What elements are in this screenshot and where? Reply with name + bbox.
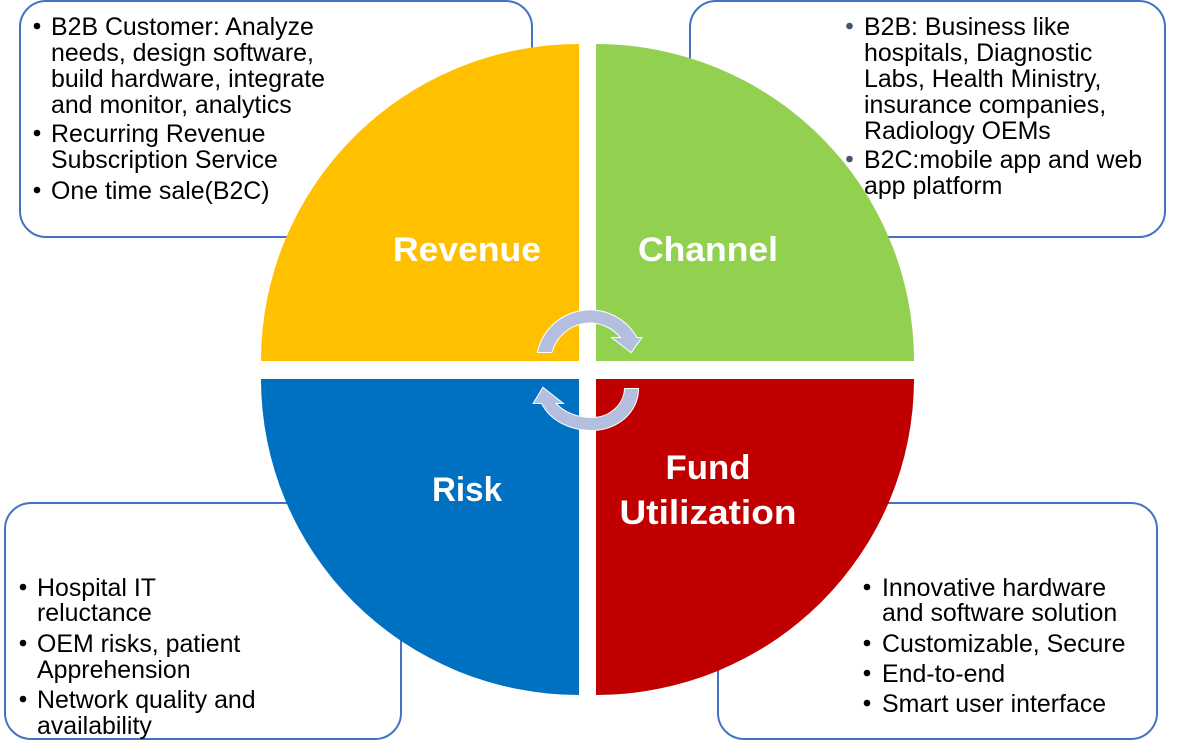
quadrant: channel (596, 44, 914, 361)
text block: fund utilization: Smart user interface (882, 690, 1106, 718)
heading: Fund Utilization: Fund (666, 449, 750, 487)
text block: revenue: Subscription Service (51, 146, 278, 174)
quadrant: risk (261, 379, 579, 695)
text block: channel: hospitals, Diagnostic (864, 39, 1092, 67)
heading: Risk: Risk (432, 471, 502, 509)
heading: Fund Utilization: Utilization (620, 494, 796, 532)
text block: channel: insurance companies, (864, 91, 1106, 119)
text block: fund utilization: and software solution (882, 599, 1117, 627)
text block: channel (846, 13, 1142, 200)
text block: risk: availability (37, 712, 152, 740)
arrow: clockwise top (538, 310, 641, 352)
text block: revenue (34, 13, 325, 205)
heading: Fund Utilization (620, 449, 796, 532)
text block: fund utilization: End-to-end (882, 660, 1005, 688)
text block: risk: Hospital IT (37, 574, 156, 602)
text block: revenue: One time sale(B2C) (51, 177, 270, 205)
text block: fund utilization: Innovative hardware (882, 574, 1106, 602)
circle diagram (261, 44, 914, 695)
text block: revenue: and monitor, analytics (51, 91, 292, 119)
panel background: fund utilization (718, 503, 1157, 739)
panel background: channel (690, 1, 1165, 237)
text block: channel: Radiology OEMs (864, 117, 1051, 145)
text block: risk: Network quality and (37, 686, 256, 714)
text block: risk (20, 574, 256, 740)
text block: risk: Apprehension (37, 656, 191, 684)
panel background: revenue (20, 1, 532, 237)
text block: risk: reluctance (37, 599, 152, 627)
heading: Channel: Channel (638, 231, 778, 269)
quadrant: revenue (261, 44, 579, 361)
text block: channel: B2C:mobile app and web (864, 146, 1142, 174)
text block: channel: app platform (864, 172, 1002, 200)
text block: fund utilization: Customizable, Secure (882, 630, 1126, 658)
text block: revenue: B2B Customer: Analyze (51, 13, 314, 41)
arrow: clockwise bottom (534, 388, 638, 430)
text block: channel: Labs, Health Ministry, (864, 65, 1101, 93)
text block: revenue: Recurring Revenue (51, 120, 265, 148)
text block: revenue: needs, design software, (51, 39, 314, 67)
heading: Revenue: Revenue (393, 231, 541, 269)
text block: fund utilization (864, 574, 1126, 718)
text block: revenue: build hardware, integrate (51, 65, 325, 93)
text block: risk: OEM risks, patient (37, 630, 240, 658)
text block: channel: B2B: Business like (864, 13, 1070, 41)
quadrant: fund utilization (596, 379, 914, 695)
panel background: risk (5, 503, 401, 739)
